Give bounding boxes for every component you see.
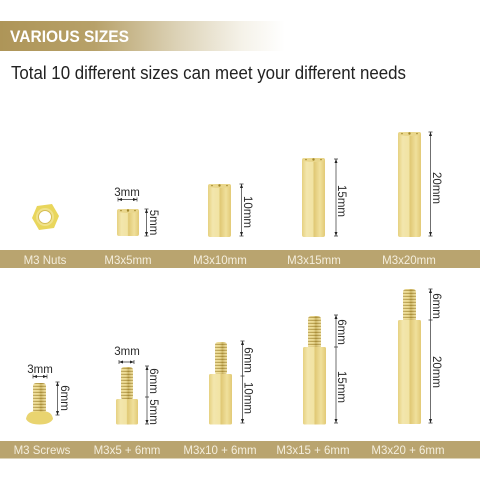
dimension: M3x10 + 6 [240, 341, 254, 423]
dimension: M3x5 + 6: 3mm [114, 346, 140, 358]
dimension: M3x5 width and height: 5mm [147, 210, 159, 235]
dimension: M3x5 width and height: 3mm [114, 187, 140, 199]
part: M3x15 standoff [302, 158, 325, 237]
header band: VARIOUS SIZES [0, 21, 285, 51]
label strip: bottom row [0, 441, 480, 458]
dimension: M3x15 + 6: 15mm [335, 371, 347, 403]
part: M3 screw [26, 383, 53, 424]
part: M3x10 + 6 standoff [209, 342, 232, 424]
dimension: M3x20 + 6: 20mm [430, 356, 442, 388]
dimension: M3x10 height [240, 184, 253, 236]
dimension: M3 screw width and length [27, 364, 70, 415]
dimension: M3x15 height [334, 159, 347, 236]
dimension: M3 screw width and length: 3mm [27, 364, 53, 376]
label strip: bottom row: M3x15 + 6mm [276, 445, 350, 457]
dimension: M3x5 + 6: 5mm [147, 399, 159, 425]
label strip: top row [0, 250, 480, 268]
dimension: M3x5 + 6: 6mm [147, 368, 159, 394]
part: M3x15 + 6 standoff [303, 316, 326, 424]
dimension: M3x15 + 6: 6mm [335, 319, 347, 345]
dimension: M3x5 + 6 [114, 346, 159, 425]
part: M3x10 standoff [208, 184, 231, 237]
label strip: top row: M3x15mm [287, 255, 341, 267]
part: M3x20 + 6 standoff [398, 289, 421, 424]
dimension: M3x20 + 6: 6mm [430, 293, 442, 319]
dimension: M3 screw width and length: 6mm [58, 385, 70, 411]
label strip: top row: M3 Nuts [24, 255, 67, 267]
label strip: bottom row: M3x20 + 6mm [371, 445, 445, 457]
subtitle: Total 10 different sizes can meet your different needs [11, 63, 406, 83]
label strip: top row: M3x20mm [382, 255, 436, 267]
label strip: bottom row: M3x10 + 6mm [183, 445, 257, 457]
dimension: M3x15 height: 15mm [335, 185, 347, 217]
dimension: M3x10 height: 10mm [241, 196, 253, 228]
part: M3 nut [32, 204, 59, 230]
label strip: top row: M3x5mm [104, 255, 152, 267]
dimension: M3x20 height [428, 132, 442, 236]
dimension: M3x10 + 6: 6mm [242, 347, 254, 373]
dimension: M3x10 + 6: 10mm [242, 382, 254, 414]
part: M3x20 standoff [398, 132, 421, 237]
label strip: top row: M3x10mm [193, 255, 247, 267]
dimension: M3x20 + 6 [428, 289, 442, 423]
dimension: M3x15 + 6 [334, 315, 347, 423]
dimension: M3x20 height: 20mm [430, 172, 442, 204]
part: M3x5 standoff [117, 209, 139, 236]
label strip: bottom row: M3x5 + 6mm [94, 445, 160, 457]
part: M3x5 + 6 standoff [116, 367, 138, 424]
dimension: M3x5 width and height [114, 187, 159, 236]
label strip: bottom row: M3 Screws [14, 445, 71, 457]
header band: VARIOUS SIZES: VARIOUS SIZES [10, 27, 129, 46]
